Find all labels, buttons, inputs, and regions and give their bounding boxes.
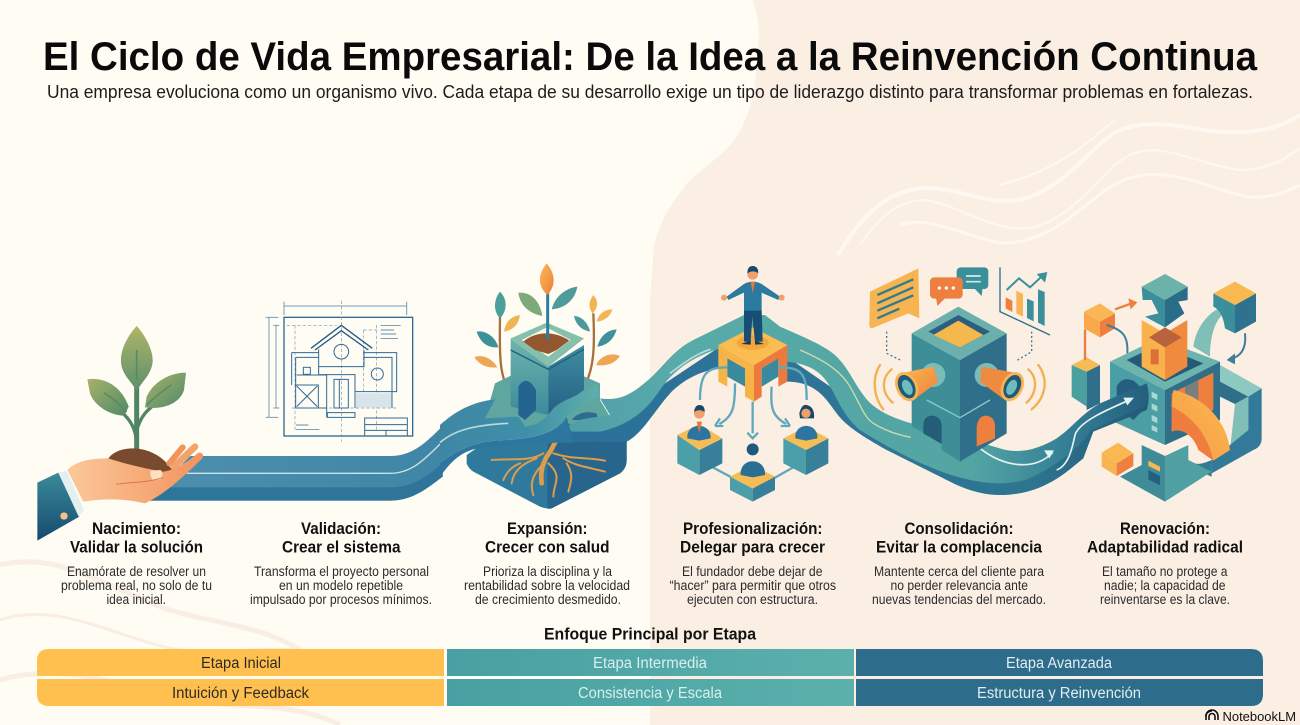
stage: Consolidación: no perder relevancia ante (890, 578, 1028, 593)
stage: Renovación: El tamaño no protege a (1102, 564, 1228, 579)
soil (108, 448, 173, 477)
roots (492, 420, 605, 497)
main cube (1110, 338, 1220, 445)
top piece (1142, 274, 1188, 327)
plant (87, 326, 186, 452)
pedestal (485, 376, 610, 427)
stage: Profesionalización: “hacer” para permitir que otros (670, 578, 836, 593)
stage: Expansión: Expansión: (507, 519, 588, 538)
pillar (1072, 357, 1100, 410)
column: etapa avanzada: Etapa Avanzada (1006, 655, 1112, 672)
tower (912, 307, 1007, 462)
stage: Expansión: Prioriza la disciplina y la (483, 564, 612, 579)
table: focus by stage (37, 649, 1263, 706)
stage: Profesionalización (670, 519, 836, 607)
ribbon dark underside: right run (787, 357, 1149, 495)
stage: Nacimiento: Enamórate de resolver un (67, 564, 206, 579)
column: etapa inicial: Intuición y Feedback (172, 685, 309, 702)
outer frame (1188, 365, 1262, 477)
stage: Renovación: Renovación: (1120, 519, 1210, 538)
icon: blueprint (266, 301, 413, 442)
stage: Nacimiento: Validar la solución (70, 538, 203, 556)
ribbon: strand wrapping expansion block (440, 383, 600, 477)
flag cube (1084, 298, 1137, 360)
sound waves (875, 365, 1045, 409)
subtitle: Una empresa evoluciona como un organismo vivo. Cada etapa de su desarrollo exige un tipo de liderazgo distinto para transformar problemas en fortalezas. (47, 82, 1253, 102)
arrows (700, 367, 807, 479)
icon: expansion tree block with roots (467, 263, 627, 509)
stage: Validación (250, 519, 432, 607)
stage: Consolidación: nuevas tendencias del mercado. (872, 592, 1046, 607)
stage: Validación: Transforma el proyecto personal (254, 564, 429, 579)
stage: Nacimiento: Nacimiento: (92, 519, 181, 538)
column: etapa inicial (37, 649, 444, 706)
curved pipe (1193, 305, 1230, 357)
stage: Consolidación: Evitar la complacencia (876, 538, 1042, 556)
title: El Ciclo de Vida Empresarial: De la Idea a la Reinvención Continua (43, 35, 1258, 79)
stage: Renovación (1087, 519, 1243, 607)
icon: consolidation tower with listening horns (869, 267, 1050, 462)
stage: Renovación: reinventarse es la clave. (1100, 592, 1230, 607)
horns (891, 363, 1028, 405)
small orange cube (1102, 443, 1133, 476)
ribbon highlights (670, 349, 1134, 470)
orange tower (1142, 320, 1187, 380)
logo: NotebookLM: NotebookLM (1222, 709, 1296, 724)
stage: Expansión: rentabilidad sobre la velocidad (464, 578, 630, 593)
team cube center (730, 443, 775, 502)
speech bubbles (930, 267, 988, 306)
stage: Profesionalización: Delegar para crecer (680, 538, 825, 556)
stage: Renovación: Adaptabilidad radical (1087, 538, 1243, 556)
stage: Validación: en un modelo repetible (279, 578, 403, 593)
stage: Profesionalización: ejecuten con estructura. (687, 592, 818, 607)
icon: renewal modular structure (1072, 274, 1262, 502)
stage: Validación: Validación: (301, 519, 381, 538)
team cube right (783, 405, 828, 475)
stage: Consolidación (872, 519, 1046, 607)
stage: Nacimiento: problema real, no solo de tu (61, 578, 212, 593)
base block (467, 440, 627, 509)
column: etapa intermedia: Consistencia y Escala (578, 685, 722, 702)
stage: Expansión: de crecimiento desmedido. (475, 592, 621, 607)
ribbon dark underside: arch left (563, 347, 720, 442)
ribbon top surface (568, 315, 1148, 483)
stage: Validación: Crear el sistema (282, 538, 401, 556)
stage: Consolidación: Mantente cerca del cliente para (874, 564, 1044, 579)
stage: Nacimiento (61, 519, 212, 607)
column: etapa inicial: Etapa Inicial (201, 655, 281, 672)
central sprout (518, 263, 577, 340)
stage: Validación: impulsado por procesos mínimos. (250, 592, 432, 607)
growth chart (1000, 267, 1050, 335)
stage: Expansión (464, 519, 630, 607)
ribbon: flat start to expansion (147, 426, 443, 501)
stage: Profesionalización: Profesionalización: (683, 519, 822, 538)
leader cube (718, 327, 787, 402)
column: etapa avanzada (856, 649, 1263, 706)
hand (67, 447, 203, 503)
ribbon: arch through consolidation to renewal (563, 315, 1149, 495)
icon: hand holding sprout (37, 326, 203, 541)
icon: professionalization leader and team (677, 266, 828, 502)
orange arch (1172, 390, 1230, 461)
team cube left (677, 405, 722, 475)
stage: Consolidación: Consolidación: (904, 519, 1014, 538)
tower (511, 323, 584, 420)
column: etapa intermedia: Etapa Intermedia (593, 655, 707, 672)
column: etapa avanzada: Estructura y Reinvención (977, 685, 1141, 702)
sleeve (37, 471, 84, 541)
column: etapa intermedia (447, 649, 854, 706)
yellow message card (869, 268, 919, 328)
top right cube (1213, 282, 1256, 333)
base (1120, 445, 1212, 502)
stage: Expansión: Crecer con salud (485, 538, 610, 556)
dashed connectors (887, 332, 1032, 361)
plants beside tower (474, 292, 620, 388)
stage: Nacimiento: idea inicial. (106, 592, 166, 607)
return arrow (1227, 333, 1245, 364)
stage: Renovación: nadie; la capacidad de (1104, 578, 1226, 593)
stage: Profesionalización: El fundador debe dejar de (682, 564, 822, 579)
leader (721, 266, 785, 345)
table heading: Enfoque Principal por Etapa (544, 626, 757, 644)
